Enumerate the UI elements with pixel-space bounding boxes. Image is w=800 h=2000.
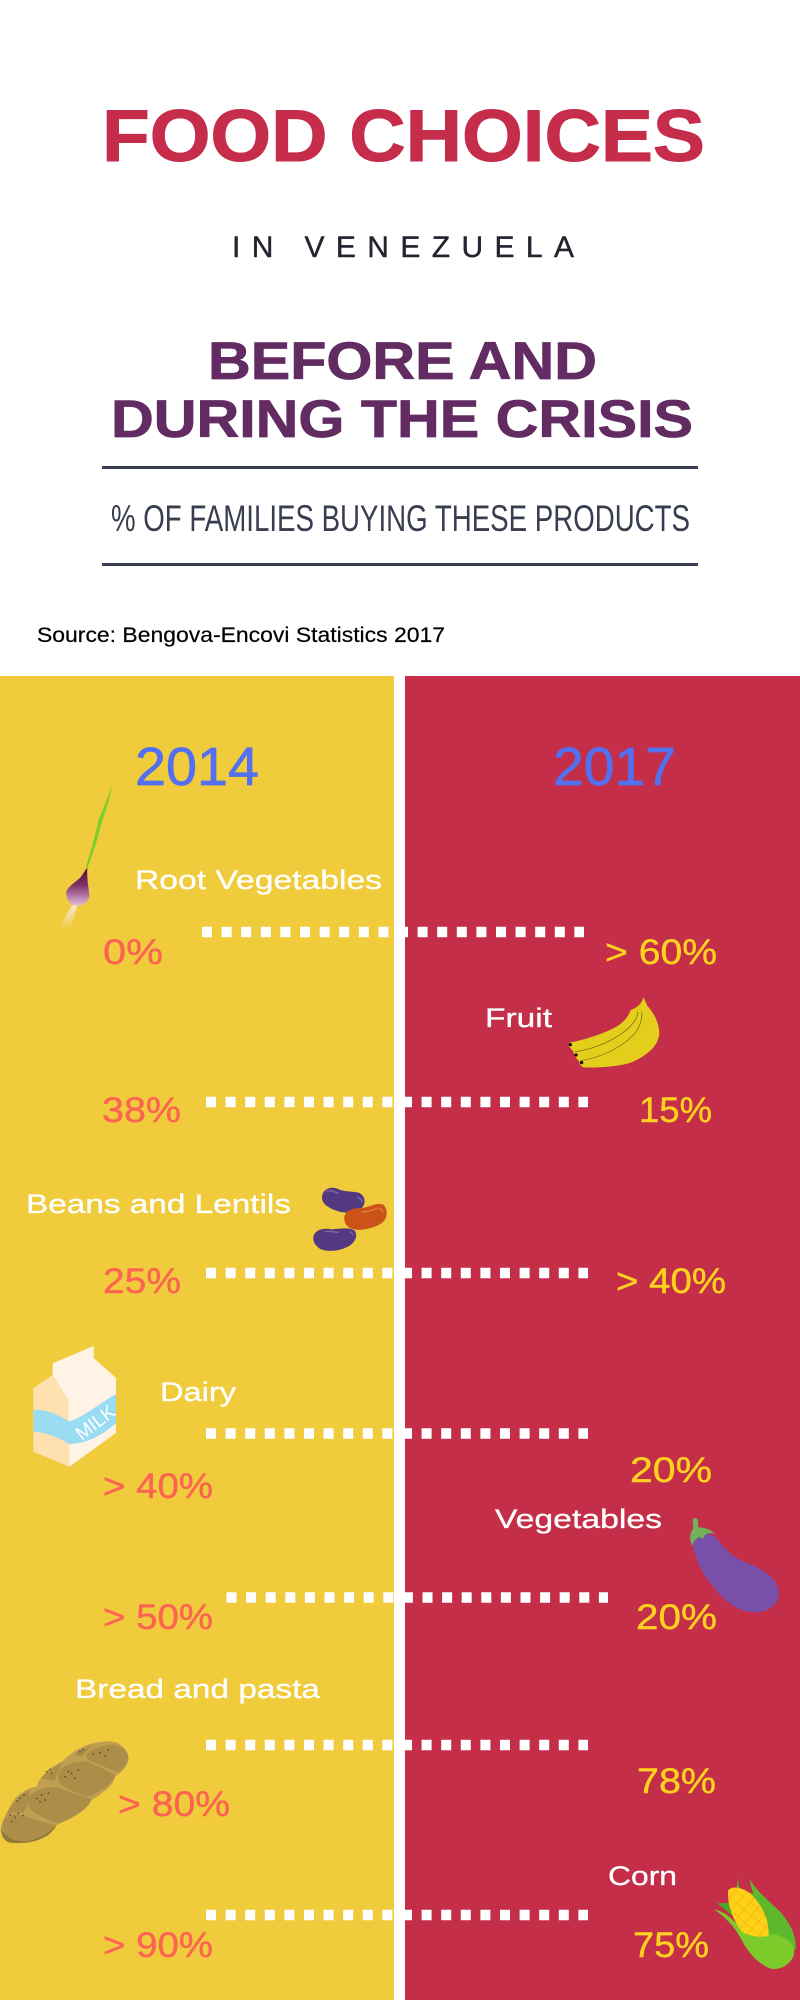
- icon: corn: [714, 1870, 796, 1969]
- icon: milk carton: MILK: [72, 1401, 120, 1445]
- value: vegetables 2017: 20%: [636, 1598, 717, 1637]
- icon: eggplant: [690, 1518, 779, 1612]
- icon: milk carton: [33, 1346, 120, 1467]
- connector: root vegetables: [202, 927, 584, 937]
- connector: beans and lentils: [206, 1268, 588, 1278]
- source note: Source: Bengova-Encovi Statistics 2017: [37, 624, 445, 647]
- connector: vegetables: [226, 1592, 608, 1603]
- label: bread and pasta: Bread and pasta: [75, 1674, 321, 1704]
- label: beans and lentils: Beans and Lentils: [26, 1189, 291, 1219]
- icon: banana: [569, 997, 659, 1068]
- panel: header: [0, 0, 800, 676]
- value: root vegetables 2014: 0%: [103, 933, 163, 972]
- connector: bread and pasta: [206, 1740, 588, 1750]
- label: vegetables: Vegetables: [495, 1504, 662, 1534]
- label: fruit: Fruit: [485, 1003, 553, 1033]
- value: dairy 2014: > 40%: [103, 1467, 213, 1506]
- icon: root vegetable: [58, 785, 112, 928]
- value: corn 2014: > 90%: [103, 1926, 213, 1965]
- value: fruit 2017: 15%: [639, 1091, 712, 1130]
- heading: before and during the crisis: DURING THE CRISIS: [111, 390, 693, 449]
- connector: dairy: [206, 1428, 588, 1439]
- heading: before and during the crisis: [111, 332, 693, 449]
- value: fruit 2014: 38%: [102, 1091, 181, 1130]
- value: dairy 2017: 20%: [630, 1451, 712, 1490]
- connector: fruit: [206, 1097, 588, 1107]
- year: 2014: 2014: [135, 737, 259, 797]
- title: FOOD CHOICES: [102, 96, 705, 177]
- value: vegetables 2014: > 50%: [103, 1598, 213, 1637]
- value: beans 2014: 25%: [103, 1262, 181, 1301]
- value: corn 2017: 75%: [633, 1926, 709, 1965]
- connector: corn: [206, 1910, 588, 1920]
- label: root vegetables: Root Vegetables: [135, 865, 382, 895]
- value: bread 2017: 78%: [637, 1762, 716, 1801]
- icon: beans: [313, 1188, 387, 1251]
- heading: before and during the crisis: BEFORE AND: [208, 332, 597, 391]
- label: dairy: Dairy: [160, 1377, 237, 1407]
- panel: 2014 column: [0, 676, 394, 2000]
- icon: bread: [1, 1741, 128, 1843]
- value: bread 2014: > 80%: [118, 1785, 230, 1824]
- subtitle: in Venezuela: IN VENEZUELA: [232, 231, 574, 264]
- panel: 2017 column: [405, 676, 800, 2000]
- year: 2017: 2017: [553, 737, 676, 797]
- value: root vegetables 2017: > 60%: [605, 933, 717, 972]
- value: beans 2017: > 40%: [616, 1262, 726, 1301]
- label: corn: Corn: [608, 1861, 677, 1891]
